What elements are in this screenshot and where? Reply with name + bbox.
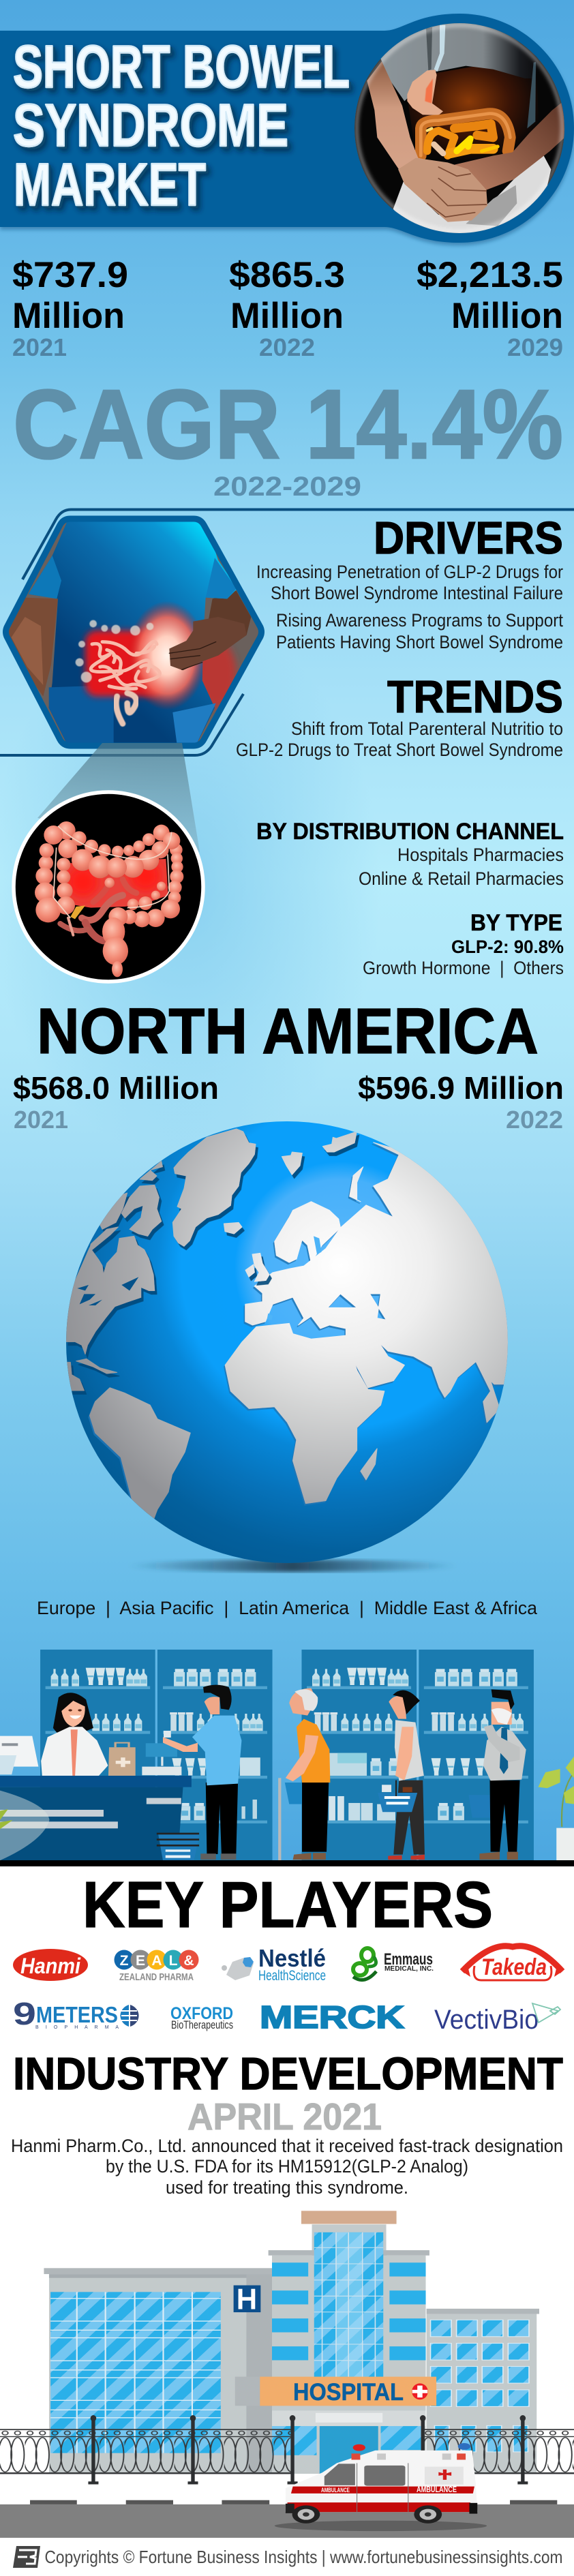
logo: Emmaus Medical: Emmaus <box>384 1950 433 1969</box>
inner abdomen <box>63 859 168 908</box>
inflamed intestine <box>85 631 165 697</box>
H sign <box>234 2286 260 2312</box>
hospital sign board <box>235 2377 436 2406</box>
card terminal <box>142 1743 181 1775</box>
left arm <box>7 598 58 697</box>
ambulance labels <box>321 2485 457 2494</box>
drivers <box>256 513 563 652</box>
stat: 2021 <box>12 255 128 361</box>
shirt <box>29 519 237 746</box>
title: SYNDROME <box>13 91 288 159</box>
stat: 2022: 2022 <box>259 333 315 361</box>
logo: Oxford BioTherapeutics: OXFORD <box>170 2004 233 2023</box>
logo: VectivBio: VectivBio <box>434 2005 539 2035</box>
logo: Takeda <box>462 1946 562 1980</box>
stat: 2021: 2021 <box>14 1106 68 1134</box>
driver 2 <box>276 610 563 652</box>
colon beads <box>35 821 183 977</box>
left arm <box>367 61 423 169</box>
ambulance labels: AMBULANCE <box>321 2487 350 2494</box>
right arm <box>455 101 564 194</box>
grey shirt <box>380 22 539 101</box>
torso <box>404 56 539 165</box>
logo: Zealand Pharma: & <box>183 1953 194 1969</box>
elderly customer <box>278 1688 330 1860</box>
stat: 2021: $737.9 <box>12 255 128 295</box>
stat: 2022: $596.9 Million <box>358 1070 564 1106</box>
eastern land <box>90 1142 520 1519</box>
photo vignette <box>357 25 562 231</box>
trends <box>236 671 563 760</box>
north america <box>13 995 564 1134</box>
driver 1 <box>256 562 563 603</box>
cone connector <box>37 743 200 852</box>
band shadow <box>0 16 574 245</box>
colon bands <box>53 826 172 918</box>
logo: Nestle Health Science <box>222 1944 326 1984</box>
by distribution channel <box>256 819 564 889</box>
header band <box>0 14 574 245</box>
logo: Merck: MERCK <box>260 1999 404 2035</box>
logo: Zealand Pharma: A <box>151 1953 162 1969</box>
logo: Nestle Health Science: Nestlé <box>258 1944 326 1972</box>
side windows <box>272 2262 426 2360</box>
hexagon photo <box>9 522 258 743</box>
by distribution channel: BY DISTRIBUTION CHANNEL <box>256 819 564 845</box>
logo: 9 Meters Biopharma: METERS <box>36 2002 118 2027</box>
title: MARKET <box>14 151 206 218</box>
right windows <box>431 2320 529 2452</box>
stat: 2022: Million <box>230 296 344 336</box>
accent lines <box>0 510 574 755</box>
shelves <box>40 1650 534 1860</box>
logo: Zealand Pharma: L <box>169 1953 178 1969</box>
by type: GLP-2: 90.8% <box>451 937 564 957</box>
plant <box>538 1757 574 1860</box>
logo: Emmaus Medical <box>353 1948 434 1980</box>
logo: Hanmi <box>13 1949 88 1981</box>
logo: Oxford BioTherapeutics <box>170 2004 233 2031</box>
ambulance <box>275 2443 487 2531</box>
left glass <box>50 2292 221 2453</box>
woman customer <box>378 1691 425 1860</box>
stat: 2021: 2021 <box>12 333 67 361</box>
tower glass <box>314 2232 383 2377</box>
ambulance labels: AMBULANCE <box>417 2485 457 2494</box>
north america: NORTH AMERICA <box>37 995 539 1067</box>
appendix tag <box>70 905 85 919</box>
logo: 9 Meters Biopharma: 9 <box>13 1996 36 2031</box>
counter <box>0 1776 192 1860</box>
other regions: Europe | Asia Pacific | Latin America | Middle East & Africa <box>37 1598 538 1618</box>
title <box>13 33 350 218</box>
trend text <box>236 718 563 760</box>
stat: 2022: $865.3 <box>229 255 345 295</box>
logo: Oxford BioTherapeutics: BioTherapeutics <box>171 2018 233 2031</box>
logo: Takeda: Takeda <box>481 1954 547 1980</box>
stat: 2022 <box>229 255 345 361</box>
logo: Emmaus Medical: MEDICAL, INC. <box>384 1965 434 1973</box>
globe shadow <box>127 1560 457 1572</box>
logo: 9 Meters Biopharma <box>13 1996 139 2031</box>
hexagon image: abdominal pain <box>0 510 574 757</box>
pharmacist <box>41 1693 108 1776</box>
date: APRIL 2021 <box>187 2095 382 2138</box>
logo: Nestle Health Science: HealthScience <box>258 1968 326 1984</box>
logo: Fortune Business Insights <box>13 2546 40 2568</box>
key players heading: KEY PLAYERS <box>82 1868 493 1941</box>
hands <box>398 158 487 222</box>
stat: 2029: 2029 <box>507 333 563 361</box>
stat: 2021: $568.0 Million <box>13 1070 219 1106</box>
monitor <box>0 1736 38 1774</box>
intestine circle image <box>14 792 203 982</box>
intestine <box>421 114 510 155</box>
logo: Zealand Pharma: E <box>136 1953 145 1969</box>
channel items: Hospitals Pharmacies <box>397 845 564 865</box>
customer 1 <box>163 1685 241 1860</box>
right arm <box>206 591 251 656</box>
pharmacy scene <box>0 1650 574 1860</box>
fence <box>0 2415 574 2485</box>
sidewalk edge <box>0 2474 574 2500</box>
trends: TRENDS <box>387 671 563 723</box>
CAGR: 2022-2029 <box>213 472 361 502</box>
development text: by the U.S. FDA for its HM15912(GLP-2 Analog) <box>106 2156 468 2177</box>
logo: Hanmi: Hanmi <box>20 1954 81 1978</box>
stat: 2029: $2,213.5 <box>417 255 563 295</box>
stat: 2021 <box>13 1070 219 1134</box>
by type <box>363 910 564 978</box>
divider bar <box>0 1860 574 1866</box>
development text <box>11 2136 563 2198</box>
channel items <box>359 845 564 889</box>
stat: 2022 <box>358 1070 564 1134</box>
hospital label: HOSPITAL <box>293 2379 404 2406</box>
stat: 2029: Million <box>451 296 563 336</box>
masked customer <box>468 1689 526 1860</box>
by type: BY TYPE <box>470 910 562 936</box>
stat: 2029 <box>417 255 563 361</box>
drivers: DRIVERS <box>374 513 563 564</box>
hexagon outline <box>5 519 262 746</box>
stomach <box>407 70 443 115</box>
paper bag <box>108 1743 136 1776</box>
logo: 9 Meters Biopharma: B I O P H A R M A <box>35 2025 119 2030</box>
band shape <box>0 14 574 243</box>
hand <box>169 617 247 670</box>
logo: Zealand Pharma: Z <box>120 1953 129 1969</box>
right side glow <box>196 639 237 708</box>
development text: used for treating this syndrome. <box>166 2177 408 2198</box>
continents <box>66 1129 520 1519</box>
atlantic land <box>66 1129 357 1391</box>
stat: 2022: 2022 <box>506 1106 563 1134</box>
hospital scene <box>0 2211 574 2538</box>
photo: abdomen with glowing intestine <box>354 22 564 235</box>
pants <box>393 155 551 235</box>
globe <box>66 1121 520 1572</box>
building <box>44 2211 539 2474</box>
logo: Zealand Pharma <box>115 1950 199 1983</box>
stat: 2021: Million <box>12 296 125 336</box>
title: SHORT BOWEL <box>13 33 350 100</box>
inland waters <box>77 1236 322 1320</box>
basket stack <box>157 1833 200 1860</box>
appendix area <box>116 693 136 724</box>
market size stats <box>12 255 563 361</box>
road <box>0 2500 574 2538</box>
logo: Zealand Pharma: ZEALAND PHARMA <box>119 1971 194 1983</box>
entrance <box>272 2410 426 2474</box>
